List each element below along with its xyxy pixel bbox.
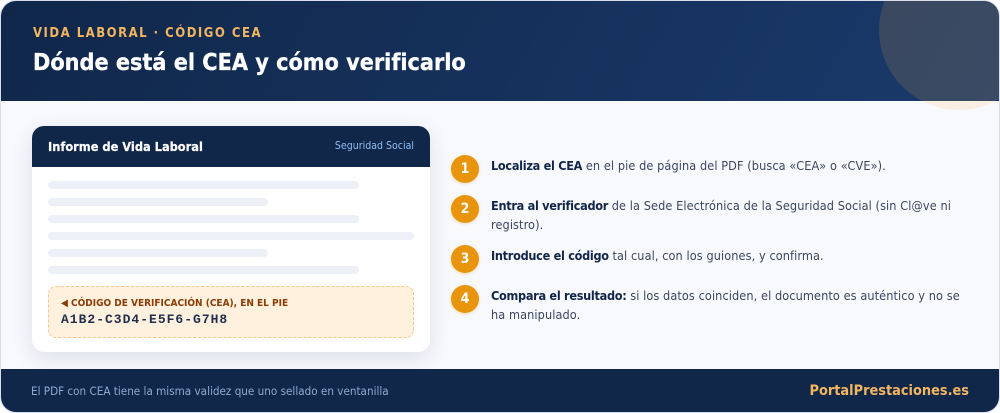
code value: A1B2-C3D4-E5F6-G7H8 (61, 312, 228, 327)
card header (32, 126, 430, 167)
step 4 number (451, 285, 479, 313)
step 3 number (451, 245, 479, 273)
placeholder text lines (48, 181, 414, 274)
step 2 number (451, 195, 479, 223)
card title: Informe de Vida Laboral (48, 139, 203, 154)
decorative circle (879, 0, 1000, 110)
step 2 text: Entra al verificador de la Sede Electrónica de la Seguridad Social (sin Cl@ve ni (491, 198, 951, 213)
brand: PortalPrestaciones.es (809, 383, 969, 399)
callout label: ◀ CÓDIGO DE VERIFICACIÓN (CEA), EN EL PIE (61, 298, 288, 309)
step 3 number: 3 (461, 251, 469, 267)
step 4 number: 4 (461, 291, 469, 307)
header band (0, 1, 1000, 101)
step 2 number: 2 (461, 201, 469, 217)
eyebrow: VIDA LABORAL · CÓDIGO CEA (33, 26, 262, 41)
step 3 text: Introduce el código tal cual, con los guiones, y confirma. (491, 248, 824, 263)
step 1 text: Localiza el CEA en el pie de página del PDF (busca «CEA» o «CVE»). (491, 158, 886, 173)
step 2 text (491, 198, 951, 232)
footer band (0, 369, 1000, 413)
step 1 number: 1 (461, 161, 469, 177)
panel: document card (32, 126, 430, 352)
footer note: El PDF con CEA tiene la misma validez que uno sellado en ventanilla (31, 384, 389, 398)
step 4 text: ha manipulado. (491, 307, 580, 322)
step 2 text: registro). (491, 217, 543, 232)
step 1 number (451, 155, 479, 183)
step 4 text: Compara el resultado: si los datos coinciden, el documento es auténtico y no se (491, 288, 960, 303)
step 4 text (491, 288, 960, 322)
callout: CEA code (48, 286, 414, 338)
title: Dónde está el CEA y cómo verificarlo (33, 49, 466, 76)
card issuer: Seguridad Social (335, 140, 414, 152)
